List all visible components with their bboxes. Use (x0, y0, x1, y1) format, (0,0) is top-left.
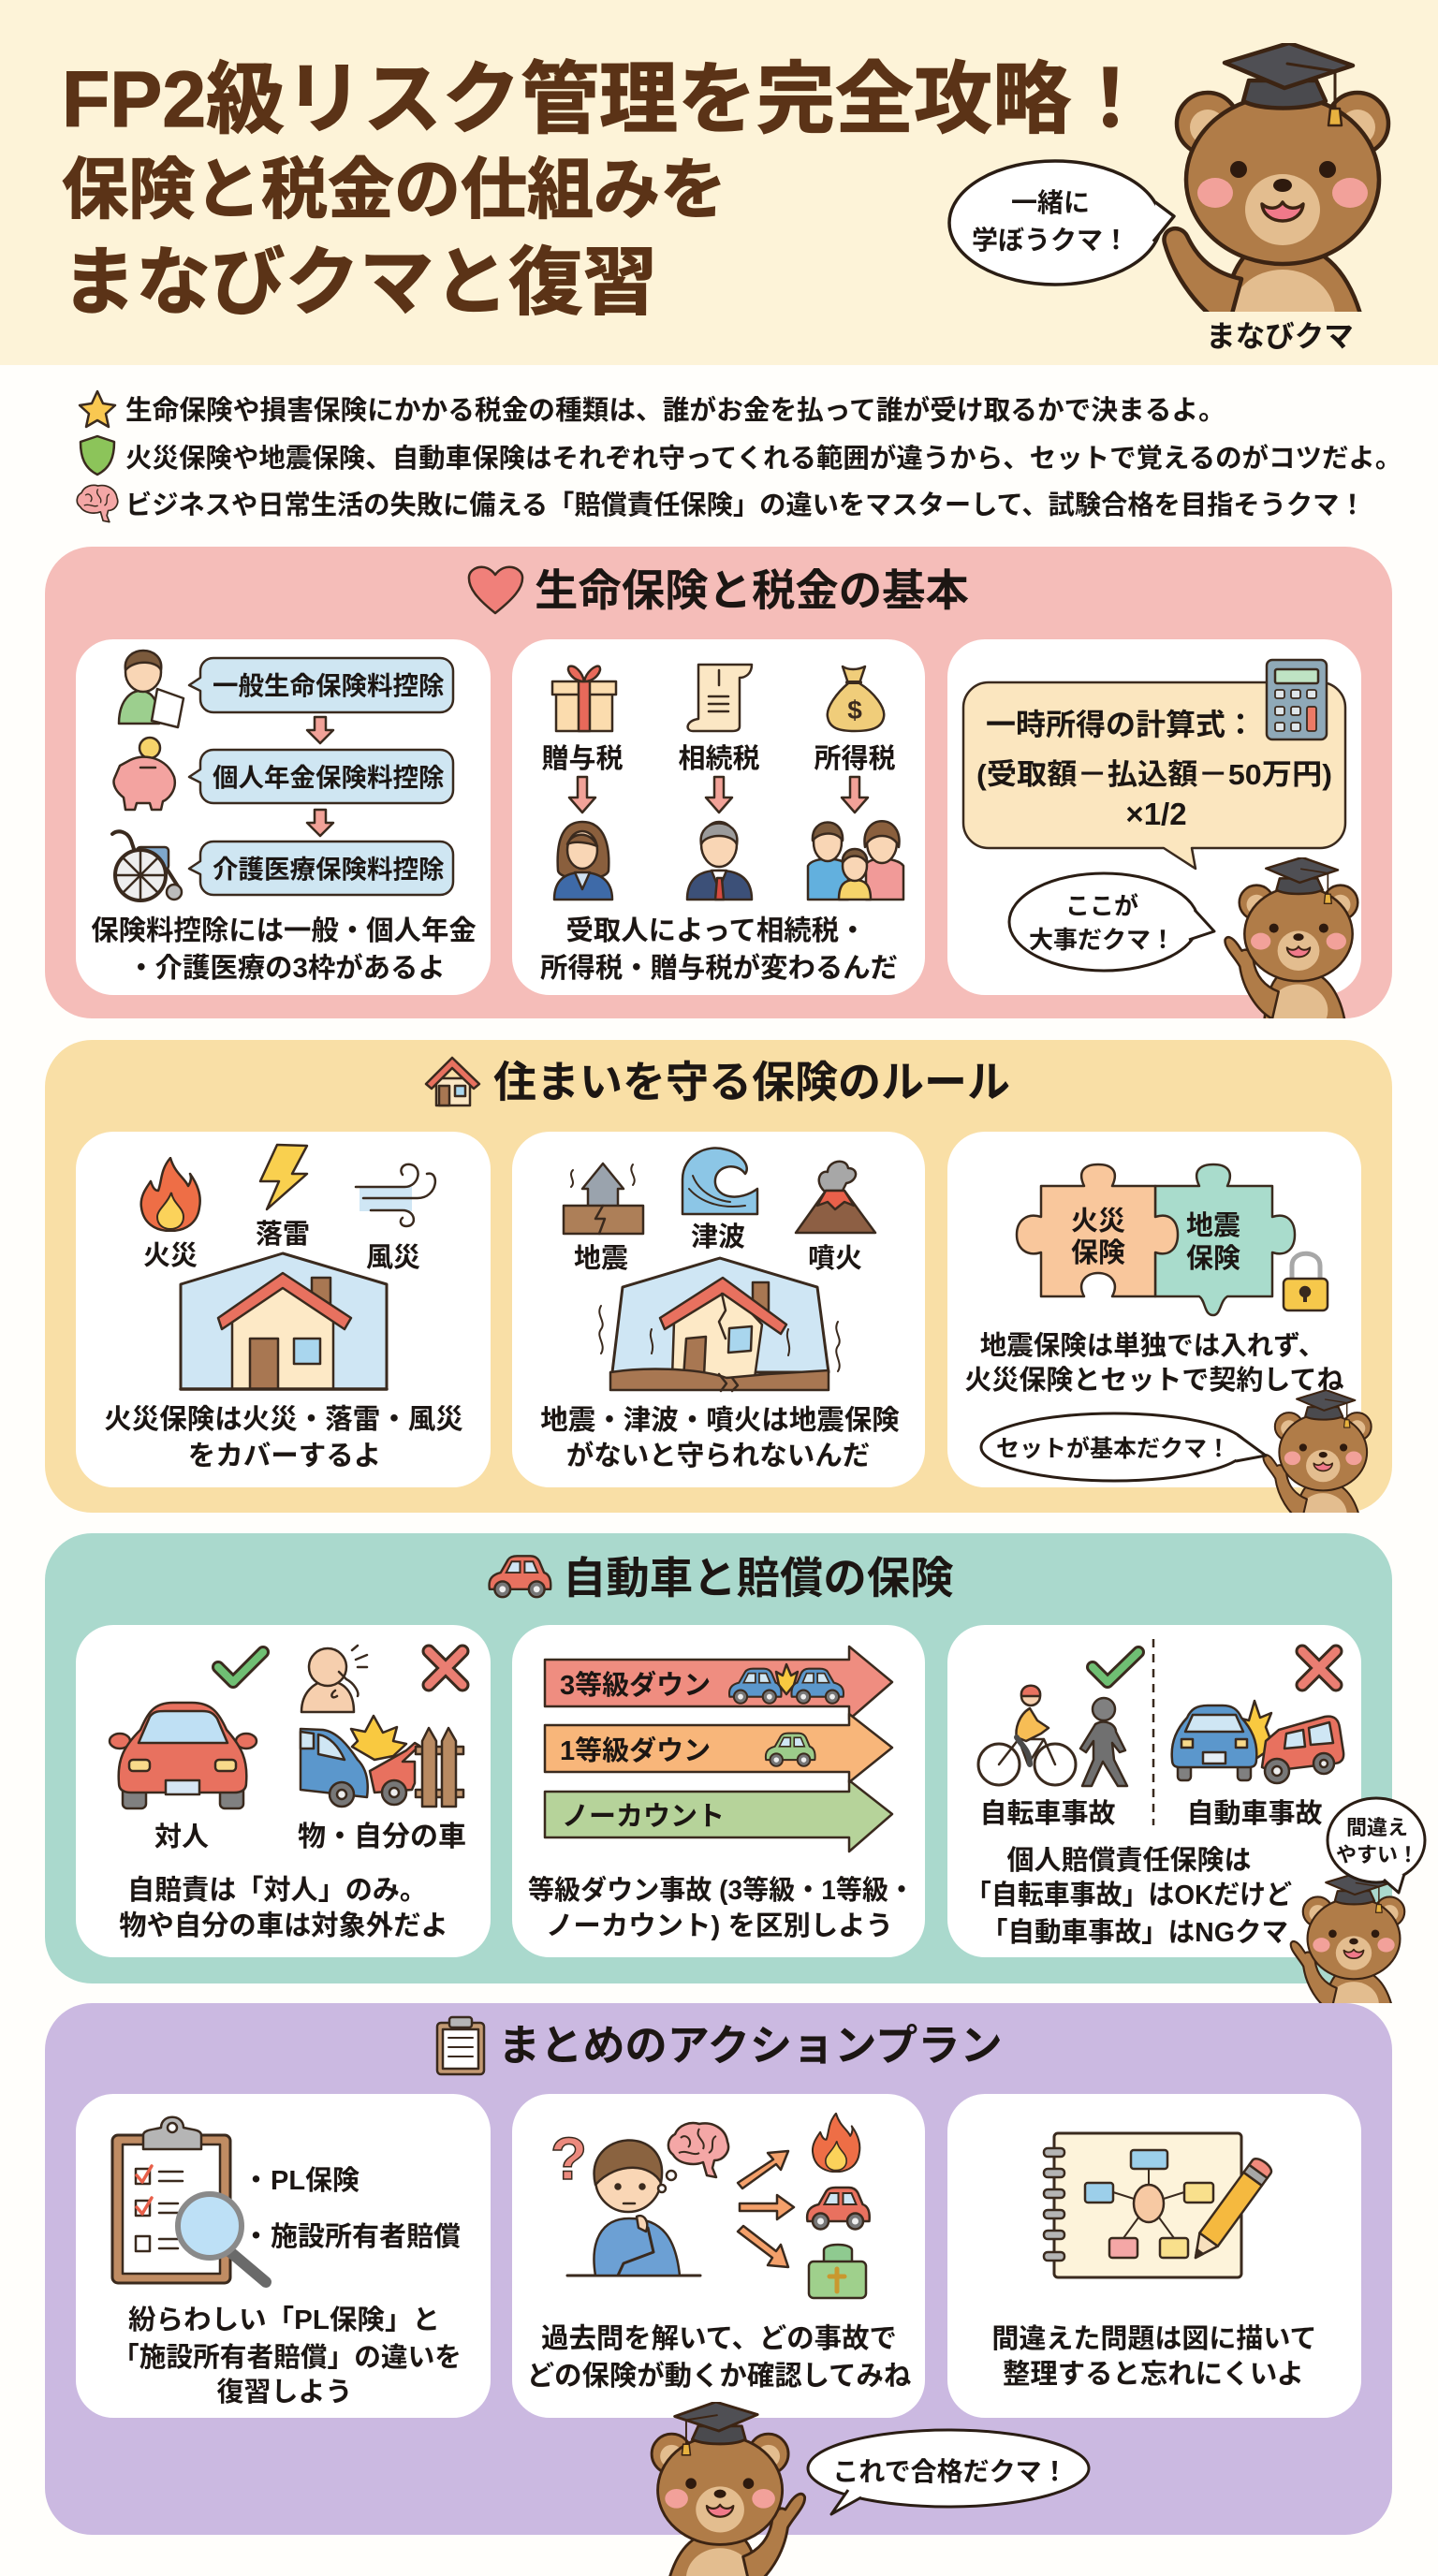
labels: 自動車事故 (1186, 1798, 1323, 1829)
panel: life insurance and tax (45, 547, 1392, 1037)
icon: car front (110, 1703, 257, 1808)
icon: fire (813, 2114, 859, 2172)
caption: 地震保険は単独では入れず、 (980, 1331, 1325, 1361)
icon: cross (429, 1651, 462, 1685)
callout: care: 介護医療保険料控除 (213, 855, 445, 884)
label: 相続税 (678, 743, 760, 774)
speech bubble: header: 一緒に (1011, 188, 1090, 217)
icon: shield (81, 436, 114, 475)
icon: thinking person (567, 2140, 700, 2276)
label: 落雷 (256, 1219, 310, 1250)
icon: piggy bank (113, 738, 175, 810)
speech bubble: header: 学ぼうクマ！ (972, 226, 1129, 255)
icon: padlock (1284, 1253, 1328, 1310)
caption: 紛らわしい「PL保険」と (128, 2305, 440, 2335)
caption: 火災保険とセットで契約してね (964, 1365, 1344, 1396)
speech bubble: final (808, 2430, 1089, 2514)
caption: がないと守られないんだ (566, 1440, 870, 1471)
icon: star (80, 391, 115, 427)
icon: lightning (260, 1145, 307, 1209)
caption (540, 915, 898, 984)
mascot name: まなびクマ (1206, 319, 1354, 353)
label: 風災 (366, 1243, 420, 1273)
title: 保険と税金の仕組みを (62, 154, 726, 227)
speech bubble: easy to mistake: 間違え (1346, 1816, 1408, 1839)
icon: car (807, 2188, 870, 2230)
damaged house under dome (599, 1258, 840, 1391)
icon: woman (554, 822, 612, 900)
card: compulsory insurance (76, 1625, 491, 1957)
icon: gift (552, 666, 616, 731)
caption: ・介護医療の3枠があるよ (127, 952, 446, 984)
icon: quake (564, 1164, 643, 1234)
icon: small car (766, 1734, 815, 1766)
icon: puzzle earthquake: 保険 (1186, 1243, 1240, 1274)
icon: cross (1302, 1651, 1336, 1685)
caption: 保険料控除には一般・個人年金 (91, 915, 477, 946)
panel: car and liability insurance (45, 1533, 1392, 1983)
speech bubble: header (949, 161, 1174, 285)
speech bubble: easy to mistake: やすい！ (1336, 1843, 1418, 1866)
caption: 地震・津波・噴火は地震保険 (540, 1405, 900, 1436)
speech bubble (981, 1413, 1266, 1481)
caption: 等級ダウン事故 (3等級・1等級・ (528, 1874, 915, 1906)
callout: formula: 一時所得の計算式： (986, 708, 1255, 741)
icon: brain (668, 2123, 728, 2177)
icon: crash with fence (301, 1716, 463, 1807)
card: personal liability (947, 1625, 1361, 1957)
caption: 「自転車事故」はOKだけど (965, 1880, 1292, 1910)
caption: 所得税・贈与税が変わるんだ (540, 952, 898, 984)
arrow: no count (545, 1780, 892, 1852)
arrow: 1 grade down: 1等級ダウン (560, 1734, 711, 1766)
icon: wheelchair (112, 831, 182, 900)
caption (991, 2323, 1317, 2390)
callout: annuity: 個人年金保険料控除 (213, 763, 445, 792)
card: mind map (947, 2094, 1361, 2418)
caption (540, 1405, 900, 1471)
mascot: worried bear (1290, 1875, 1406, 2003)
icon: puzzle earthquake (1155, 1164, 1295, 1315)
label: 噴火 (808, 1243, 862, 1274)
icon: puzzle fire (1017, 1164, 1178, 1296)
caption: 間違えた問題は図に描いて (991, 2323, 1317, 2354)
icon: clipboard with magnifier (112, 2117, 266, 2283)
icon: scroll (688, 665, 752, 731)
arrow: no count: ノーカウント (562, 1802, 725, 1832)
card: set contract (947, 1132, 1361, 1487)
list labels: ・ (242, 2222, 270, 2252)
icon: injured person (301, 1646, 367, 1712)
arrow: 3 grade down (545, 1647, 892, 1720)
header band (0, 0, 1438, 365)
caption (528, 1874, 915, 1941)
caption: 「自動車事故」はNGクマ (981, 1917, 1288, 1948)
bullet text 3: ビジネスや日常生活の失敗に備える「賠償責任保険」の違いをマスターして、試験合格を目指そうクマ！ (125, 490, 1366, 520)
mascot: surprised bear (1262, 1390, 1372, 1513)
card: rating down (512, 1625, 925, 1957)
card: past exams (512, 2094, 925, 2418)
label: 贈与税 (541, 743, 624, 774)
caption (112, 2305, 462, 2408)
house under dome (181, 1253, 387, 1389)
label: 物・自分の車 (298, 1822, 466, 1852)
speech bubble: final: これで合格だクマ！ (832, 2457, 1068, 2486)
card: deductions (76, 639, 491, 995)
icon: clipboard (437, 2017, 484, 2074)
icon: heart (469, 567, 522, 613)
label: 津波 (691, 1222, 745, 1252)
list labels (242, 2165, 461, 2252)
caption (527, 2323, 911, 2392)
caption: 火災保険は火災・落雷・風災 (104, 1404, 463, 1435)
icon: bag (809, 2245, 866, 2298)
labels (979, 1798, 1323, 1829)
icon: puzzle earthquake: 地震 (1186, 1210, 1240, 1241)
card: fire insurance (76, 1132, 491, 1487)
arrow (307, 810, 333, 836)
icon: money bag (828, 666, 884, 731)
list labels: PL保険 (271, 2165, 360, 2196)
panel: home insurance (45, 1040, 1392, 1536)
mascot: header bear (1164, 43, 1388, 363)
bullet text 2: 火災保険や地震保険、自動車保険はそれぞれ守ってくれる範囲が違うから、セットで覚えるのがコツだよ。 (125, 443, 1401, 474)
icon: pencil (1186, 2156, 1274, 2264)
caption: 過去問を解いて、どの事故で (541, 2323, 897, 2354)
caption: 復習しよう (216, 2377, 353, 2408)
heading: 生命保険と税金の基本 (535, 566, 969, 615)
card: review (76, 2094, 491, 2418)
icon: check (1093, 1652, 1138, 1682)
mascot: thumbs-up bear (652, 2402, 805, 2576)
icon: puzzle fire: 保険 (1071, 1237, 1125, 1268)
caption: 整理すると忘れにくいよ (1003, 2359, 1304, 2390)
icon: colliding cars (729, 1664, 844, 1704)
callout: general life (189, 658, 453, 712)
caption: 受取人によって相続税・ (566, 915, 866, 946)
icon: wave (682, 1148, 757, 1214)
caption: どの保険が動くか確認してみね (527, 2360, 911, 2392)
title: まなびクマと復習 (62, 241, 657, 324)
icon: businessman (687, 822, 752, 900)
caption: 「施設所有者賠償」の違いを (112, 2342, 462, 2373)
speech bubble: ここが (1065, 892, 1138, 920)
icon: notebook with diagram (1044, 2133, 1241, 2277)
heading: まとめのアクションプラン (498, 2022, 1003, 2070)
bullet text 1: 生命保険や損害保険にかかる税金の種類は、誰がお金を払って誰が受け取るかで決まるよ。 (125, 395, 1225, 426)
arrow (307, 717, 333, 743)
icon: car crash (1172, 1701, 1343, 1783)
caption: 物や自分の車は対象外だよ (119, 1910, 448, 1941)
icon: car (490, 1556, 550, 1597)
icon: person with document (119, 651, 183, 727)
intro bullets (77, 391, 1401, 522)
icon: family (808, 821, 903, 900)
icon: wind (356, 1164, 435, 1226)
icon: question mark: ? (550, 2125, 587, 2192)
arrows (569, 777, 868, 812)
caption (119, 1875, 448, 1941)
icon: volcano (796, 1162, 875, 1233)
arrows (738, 2151, 794, 2267)
speech bubble (1009, 873, 1214, 971)
heading: 自動車と賠償の保険 (563, 1554, 954, 1603)
list labels: 施設所有者賠償 (271, 2221, 461, 2252)
callout: formula: ×1/2 (1125, 797, 1187, 831)
title (62, 55, 1150, 324)
caption (964, 1331, 1344, 1396)
icon: puzzle fire: 火災 (1071, 1207, 1125, 1237)
icon: cyclist and pedestrian (978, 1686, 1127, 1786)
callout: care (189, 842, 453, 895)
card: earthquake insurance (512, 1132, 925, 1487)
caption: 個人賠償責任保険は (1006, 1845, 1252, 1876)
card: recipients and tax (512, 639, 925, 995)
caption: をカバーするよ (188, 1441, 381, 1471)
panel: action plan (45, 2003, 1392, 2535)
caption: ノーカウント) を区別しよう (546, 1911, 893, 1941)
labels: 自転車事故 (979, 1798, 1116, 1829)
label: 火災 (143, 1241, 198, 1271)
callout: general life: 一般生命保険料控除 (213, 671, 445, 700)
title: FP2級リスク管理を完全攻略！ (62, 55, 1150, 143)
icon: check (218, 1652, 263, 1682)
label: 地震 (574, 1243, 628, 1274)
speech bubble: easy to mistake (1328, 1798, 1425, 1893)
callout: formula: (受取額－払込額－50万円) (976, 758, 1332, 791)
arrow: 1 grade down (545, 1714, 892, 1782)
label: 対人 (154, 1822, 209, 1852)
arrow: 3 grade down: 3等級ダウン (560, 1669, 711, 1701)
mascot: pointing bear (1224, 857, 1359, 1018)
icon: house (426, 1058, 479, 1105)
caption (965, 1845, 1292, 1948)
icon: calculator (1267, 660, 1327, 739)
icon: money bag: $ (847, 695, 862, 724)
heading: 住まいを守る保険のルール (493, 1058, 1010, 1106)
caption (104, 1404, 463, 1471)
callout: annuity (189, 750, 453, 803)
list labels: ・ (242, 2166, 270, 2196)
caption (91, 915, 477, 984)
speech bubble: セットが基本だクマ！ (996, 1435, 1230, 1462)
icon: fire (141, 1158, 200, 1231)
speech bubble: 大事だクマ！ (1029, 926, 1175, 954)
callout: formula (963, 682, 1345, 869)
icon: brain (77, 485, 118, 522)
label: 所得税 (814, 743, 896, 774)
card: lump-sum income (947, 639, 1361, 995)
caption: 自賠責は「対人」のみ。 (127, 1875, 427, 1906)
